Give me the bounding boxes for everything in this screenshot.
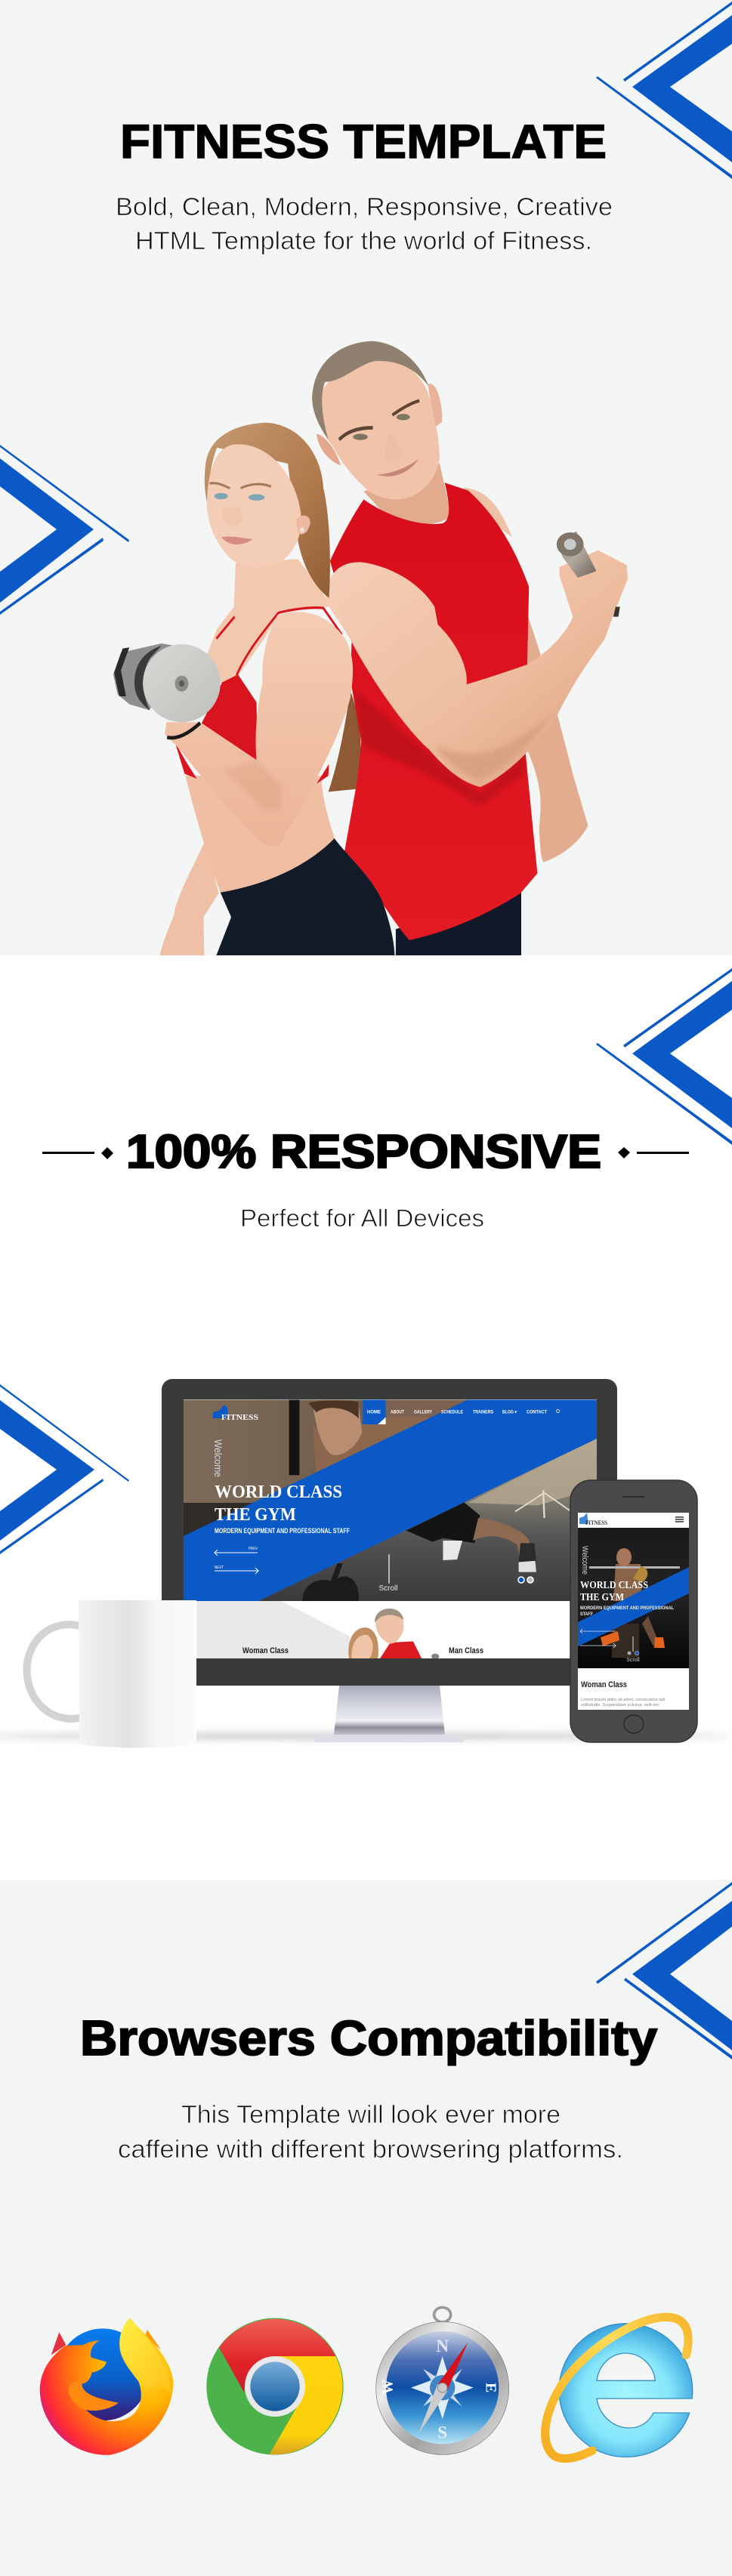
phone speaker [622, 1496, 645, 1498]
website classes strip [197, 1601, 439, 1659]
subtitle: HTML Template for the world of Fitness. [135, 227, 592, 255]
website slider arrows: PREV [249, 1547, 258, 1551]
website welcome label: Welcome [212, 1439, 224, 1477]
icon: left chevron [0, 1384, 129, 1554]
heading: Browsers Compatibility [80, 2010, 657, 2065]
icon: firefox [40, 2318, 173, 2455]
website navigation: CONTACT [527, 1411, 547, 1415]
phone headline: WORLD CLASS [580, 1580, 648, 1591]
website scroll indicator: Scroll [378, 1584, 398, 1593]
website navigation: HOME [367, 1411, 381, 1415]
wristband [167, 723, 200, 738]
woman leggings [216, 838, 395, 955]
phone home button [624, 1715, 644, 1733]
man right shoulder [463, 487, 512, 537]
subtitle [116, 193, 613, 255]
woman long hair [329, 690, 361, 791]
man leggings [396, 891, 521, 955]
website headline [215, 1482, 342, 1525]
icon: safari: W [379, 2380, 396, 2395]
phone tagline: MORDERN EQUIPMENT AND PROFESSIONAL [580, 1606, 674, 1611]
small dumbbell [557, 531, 620, 617]
website navigation: GALLERY [414, 1411, 432, 1415]
panel: browsers section [0, 1880, 732, 2576]
description: This Template will look ever more [181, 2100, 561, 2128]
phone section title: Woman Class [581, 1680, 627, 1689]
woman waist [185, 776, 335, 893]
woman neck and chest [207, 559, 330, 684]
man neck [363, 464, 452, 524]
phone menu icon [675, 1516, 684, 1522]
website navigation: TRAINERS [473, 1411, 493, 1415]
phone tagline: STAFF [580, 1612, 593, 1617]
website class labels [242, 1646, 483, 1655]
phone body copy: sollicitudin. Suspendisse pulvinar, velit nec [581, 1703, 659, 1708]
large dumbbell [113, 643, 221, 722]
subtitle: Bold, Clean, Modern, Responsive, Creative [116, 193, 613, 221]
man tank top [330, 483, 537, 940]
floor shadow [0, 1733, 732, 1739]
phone body copy: Lorem ipsum dolor sit amet, consectetur adi [581, 1698, 665, 1702]
woman bicep arm [165, 612, 353, 846]
website navigation: BLOG ▾ [502, 1411, 517, 1415]
panel: hero section [0, 0, 732, 955]
photo: fitness couple [113, 341, 628, 955]
man far arm [527, 615, 588, 862]
phone headline [580, 1580, 648, 1603]
website navigation: ABOUT [391, 1411, 404, 1415]
icon: safari: N [436, 2337, 449, 2356]
heading with ornaments: 100% RESPONSIVE [126, 1126, 601, 1178]
website slider arrows: NEXT [215, 1566, 224, 1570]
panel: responsive section [0, 968, 732, 1748]
phone slider controls: Scroll [626, 1658, 640, 1663]
woman far arm [159, 840, 219, 955]
icon: internet explorer [545, 2317, 693, 2458]
monitor bezel [162, 1379, 617, 1686]
heading with ornaments [42, 1126, 689, 1178]
monitor stand [314, 1686, 464, 1742]
website headline: THE GYM [215, 1505, 296, 1525]
icon: left chevron [0, 445, 129, 615]
website slider arrows [215, 1547, 258, 1574]
icon: top right chevron [596, 1882, 732, 2059]
woman hair [205, 423, 330, 598]
icon: top right chevron [596, 2, 732, 179]
description: caffeine with different browsering platforms. [118, 2135, 623, 2163]
website hero art [184, 1399, 597, 1601]
man flexed arm [325, 551, 628, 787]
description [118, 2100, 623, 2163]
phone tagline [580, 1606, 674, 1617]
website tagline: MORDERN EQUIPMENT AND PROFESSIONAL STAFF [215, 1527, 350, 1535]
website navigation: SCHEDULE [441, 1411, 463, 1415]
device: desktop monitor [162, 1379, 617, 1742]
phone screen [578, 1513, 689, 1710]
website navigation [367, 1409, 559, 1415]
website class labels: Woman Class [242, 1646, 289, 1655]
object: coffee mug [26, 1600, 196, 1748]
icon: safari: S [437, 2423, 447, 2442]
phone welcome label: Welcome [580, 1546, 589, 1575]
icon: chrome [206, 2318, 344, 2455]
website headline: WORLD CLASS [215, 1482, 342, 1502]
phone slider controls [580, 1629, 640, 1663]
device: smartphone [570, 1480, 697, 1742]
phone logo: FITNESS [585, 1519, 607, 1526]
icon: safari: E [482, 2383, 499, 2392]
phone headline: THE GYM [580, 1592, 624, 1603]
phone body copy [581, 1698, 665, 1708]
website slider dots [518, 1577, 533, 1583]
icon: top right chevron [596, 968, 732, 1145]
phone logo [579, 1513, 607, 1526]
title: FITNESS TEMPLATE [120, 116, 607, 168]
icon: safari [376, 2307, 509, 2454]
website logo [213, 1405, 258, 1422]
woman head [207, 444, 310, 567]
man head [312, 341, 442, 499]
woman red top [175, 674, 329, 784]
website class labels: Man Class [449, 1646, 483, 1655]
subheading: Perfect for All Devices [240, 1205, 484, 1232]
woman straps [216, 608, 341, 675]
website logo: FITNESS [221, 1413, 258, 1422]
